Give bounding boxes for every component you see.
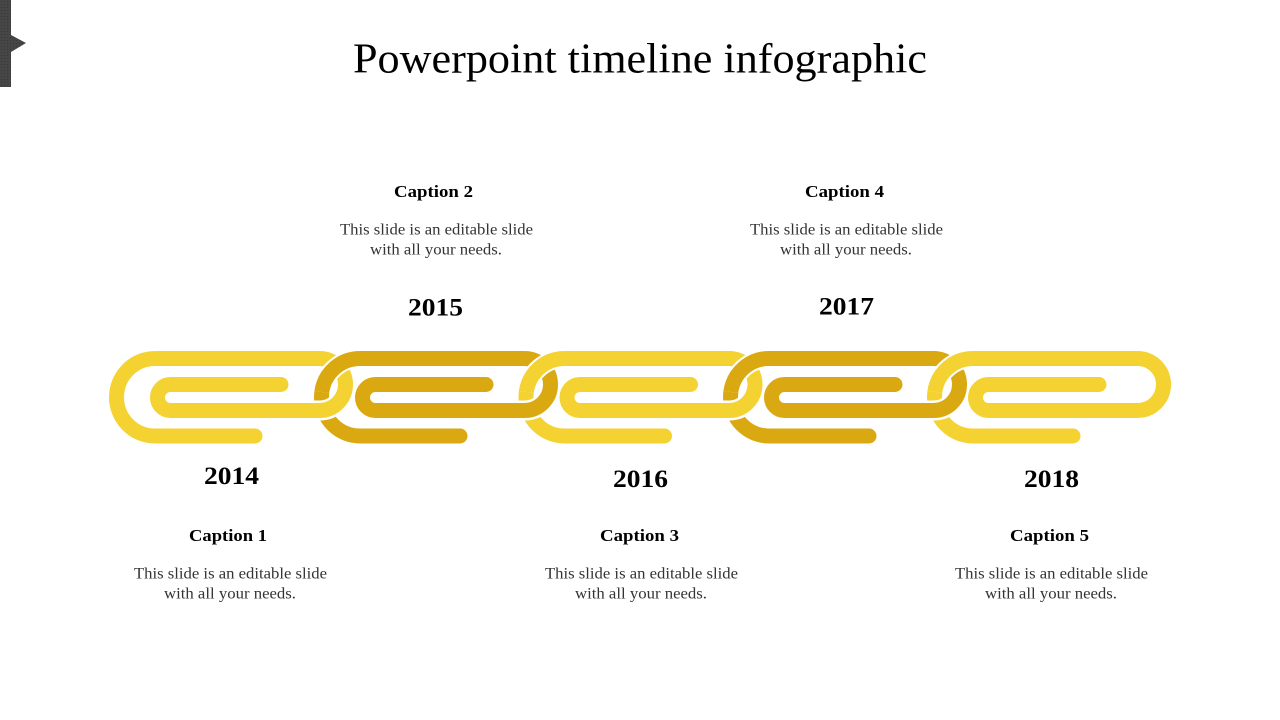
text block: caption 3: Caption 3 [600,526,679,545]
text block: caption 1: Caption 1 [189,526,267,545]
text block: caption 4: Caption 4 [805,182,884,201]
chain link 3: 2016 [526,358,755,436]
text block: caption 4 [750,182,943,258]
year 2014: 2014 [204,463,260,490]
text block: caption 4: with all your needs. [780,242,912,258]
title: Powerpoint timeline infographic [353,36,927,82]
chain timeline [116,358,1163,436]
text block: caption 2: This slide is an editable slide [340,222,533,238]
text block: caption 5: Caption 5 [1010,526,1089,545]
text block: caption 2 [340,182,533,258]
year 2015: 2015 [408,294,463,322]
year 2017: 2017 [819,294,874,320]
link crossing 4-5 [935,358,988,392]
text block: caption 5: This slide is an editable slide [955,566,1148,582]
icon: corner bookmark tab [0,0,26,87]
link crossing 1-2 [322,358,375,392]
link crossing 2-3 [526,358,580,392]
text block: caption 4: This slide is an editable slide [750,222,943,238]
text block: caption 1 [134,526,327,602]
text block: caption 5 [955,526,1148,602]
text block: caption 2: Caption 2 [394,182,473,201]
chain link 4: 2017 [730,358,960,436]
year 2018: 2018 [1024,466,1079,493]
text block: caption 1: with all your needs. [164,586,296,602]
text block: caption 1: This slide is an editable slide [134,566,327,582]
text block: caption 2: with all your needs. [370,242,502,258]
text block: caption 3 [545,526,738,602]
text block: caption 3: with all your needs. [575,586,707,602]
text block: caption 5: with all your needs. [985,586,1117,602]
chain link 5: 2018 [934,358,1164,436]
year 2016: 2016 [613,466,668,493]
text block: caption 3: This slide is an editable slide [545,566,738,582]
chain link 1: 2014 [116,358,345,436]
chain link 2: 2015 [322,358,550,436]
link crossing 3-4 [731,358,784,392]
